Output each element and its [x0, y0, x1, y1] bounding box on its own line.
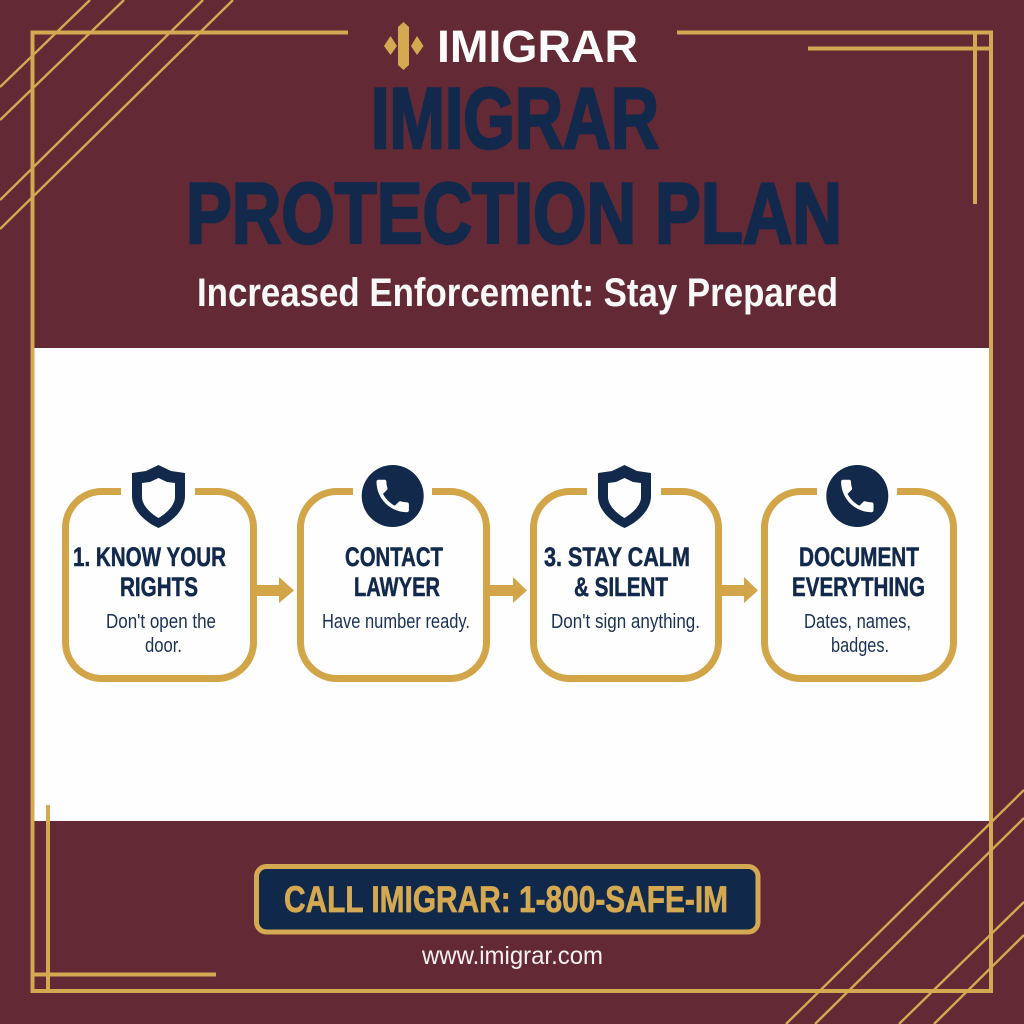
- title: IMIGRAR: [371, 71, 659, 167]
- step body: Don't sign anything.: [551, 611, 700, 633]
- step body: Dates, names,: [804, 611, 911, 633]
- card outline: [66, 492, 254, 678]
- card outline: [534, 492, 718, 678]
- logo wordmark: IMIGRAR: [437, 21, 638, 72]
- step heading: [544, 542, 690, 602]
- card outline: [764, 492, 954, 678]
- step heading: LAWYER: [354, 572, 440, 602]
- icon: shield: [132, 465, 185, 528]
- step heading: RIGHTS: [120, 572, 198, 602]
- step heading: [73, 542, 226, 602]
- website url: www.imigrar.com: [421, 942, 603, 970]
- step heading: 1. KNOW YOUR: [73, 542, 226, 572]
- step 3: stay calm and silent: [534, 465, 718, 678]
- icon: logo emblem: [384, 22, 424, 70]
- step body: door.: [145, 635, 182, 657]
- call to action button: [256, 866, 758, 932]
- step body: Don't open the: [106, 611, 216, 633]
- icon: shield: [598, 465, 651, 528]
- step heading: [792, 542, 925, 602]
- step heading: & SILENT: [574, 572, 668, 602]
- title: PROTECTION PLAN: [186, 166, 842, 262]
- icon: phone: [826, 465, 888, 527]
- arrow: step 2 to 3: [490, 577, 527, 603]
- arrow: step 1 to 2: [257, 577, 294, 603]
- panel: white steps area: [33, 348, 991, 821]
- call to action button: CALL IMIGRAR: 1-800-SAFE-IM: [284, 879, 728, 920]
- icon: phone: [362, 465, 424, 527]
- step body: Have number ready.: [322, 611, 470, 633]
- step heading: CONTACT: [345, 542, 443, 572]
- step body: badges.: [831, 635, 889, 657]
- logo: IMIGRAR brand: [384, 21, 638, 72]
- subtitle: Increased Enforcement: Stay Prepared: [197, 271, 838, 315]
- step heading: 3. STAY CALM: [544, 542, 690, 572]
- step body: [804, 611, 911, 657]
- step 1: know your rights: [66, 465, 254, 678]
- step 2: contact lawyer: [300, 465, 486, 678]
- card outline: [300, 492, 486, 678]
- title: [186, 71, 842, 262]
- step body: [106, 611, 216, 657]
- step heading: [345, 542, 443, 602]
- step 4: document everything: [764, 465, 954, 678]
- arrow: step 3 to 4: [722, 577, 758, 603]
- step heading: EVERYTHING: [792, 572, 925, 602]
- step heading: DOCUMENT: [799, 542, 919, 572]
